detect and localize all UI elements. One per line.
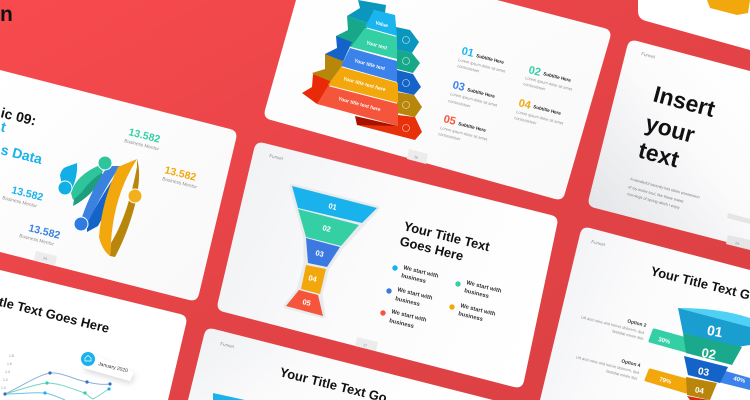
layer numbers: 05: [301, 297, 312, 308]
heading: s Data: [0, 141, 44, 167]
bullet: red: We start with: [391, 309, 427, 324]
axis labels: 1.6: [7, 362, 12, 366]
layer 03: [306, 238, 340, 267]
bullet: red: business: [389, 318, 414, 330]
back steps: [302, 0, 398, 128]
body text: of my entire soul, like these sweet: [628, 185, 685, 204]
item 03: Lorem ipsum dolor sit amet: [450, 91, 499, 108]
heading: tle Text Goes Here: [0, 294, 111, 336]
blue ribbon: [82, 166, 120, 232]
metric: blue: Business Mentor: [19, 233, 55, 248]
pyramid chart: [302, 0, 422, 140]
item 03: consectetuer: [448, 98, 472, 109]
metric: teal: 13.582: [127, 126, 161, 146]
card: ribbons: [0, 70, 236, 300]
metric: cyan: [2, 184, 44, 210]
heading: [0, 104, 44, 167]
front layers: Value: [374, 20, 389, 29]
axis labels: 1.4: [5, 370, 10, 374]
bullet: teal: [455, 280, 502, 300]
panel: ribbon data slide: [0, 70, 236, 300]
metric: yellow: 13.582: [163, 164, 197, 184]
layer numbers: 03: [314, 248, 325, 259]
heading: [636, 81, 718, 173]
item 03: [448, 79, 499, 109]
metric: cyan: 13.582: [10, 184, 44, 204]
metric: blue: [19, 222, 61, 248]
axis labels: [1, 354, 14, 390]
panel: funnel slide: [218, 143, 557, 387]
item 05: Subtitle Here: [458, 121, 487, 133]
tier 04: 04: [694, 385, 705, 396]
front layers: Your text: [365, 40, 388, 52]
heading: text: [636, 137, 682, 173]
item 05: [438, 113, 489, 142]
layer 02: [298, 209, 359, 246]
item 02: Lorem ipsum dolor sit amet: [525, 75, 574, 92]
item 02: Subtitle Here: [543, 71, 572, 83]
logo letter: n: [0, 3, 13, 26]
heading: Your Title Text G: [649, 263, 750, 303]
tier 05: [687, 396, 709, 400]
body text: mornings of spring which I enjoy: [627, 192, 680, 210]
item 04: 04: [517, 97, 533, 112]
item 05: Lorem ipsum dolor sit amet: [440, 125, 489, 142]
line chart: [3, 371, 112, 400]
teal ribbon: [71, 165, 103, 206]
card: funnel: [218, 143, 557, 387]
item 03: 03: [451, 79, 466, 94]
layer numbers: [301, 201, 338, 308]
bullet: cyan: We start with: [403, 265, 439, 280]
heading: ic 09:: [0, 104, 38, 129]
pill: 79%: [646, 370, 690, 392]
metric: yellow: Business Mentor: [162, 176, 198, 191]
option 4: fastidiat minim fais: [606, 368, 638, 381]
panel: top right slide: [638, 0, 750, 50]
front layers: Your title text: [353, 58, 386, 72]
option 2: Lift and raise and helvet dolorem, qua: [581, 314, 646, 335]
label: Funnel: [220, 341, 235, 349]
heading: your: [643, 110, 698, 148]
card: 3D funnel: [540, 228, 750, 400]
metric: cyan: Business Mentor: [2, 195, 38, 210]
bullet: blue: business: [395, 296, 420, 308]
bullet: cyan: business: [401, 273, 426, 285]
page tab: 24: [735, 241, 740, 246]
body text: A wonderful serenity has taken possession: [630, 177, 700, 200]
card: insert: [589, 41, 750, 248]
bullet: yellow: business: [458, 311, 483, 323]
bullet: red: [380, 309, 427, 330]
bullet: teal: business: [464, 288, 489, 300]
ribbon chart: [58, 156, 142, 257]
item 04: Lorem ipsum dolor sit amet: [516, 109, 565, 126]
option 4: Lift and raise and helvet dolorem, qua: [576, 354, 641, 375]
item 02: 02: [527, 64, 542, 79]
page tab: 26: [414, 155, 419, 160]
card: bottom centre: [188, 329, 493, 400]
bullet: teal: We start with: [466, 280, 502, 295]
date pill: January 2020: [98, 361, 129, 374]
item 03: Subtitle Here: [467, 87, 496, 99]
pill: 30%: [650, 330, 690, 351]
metric: blue: 13.582: [27, 222, 61, 242]
item 01: [457, 45, 507, 74]
3D funnel: [678, 308, 750, 400]
heading: Goes Here: [398, 233, 465, 264]
ribbon icons: [58, 156, 142, 231]
layer numbers: 02: [321, 223, 332, 234]
label: Funnel: [641, 51, 656, 60]
panel: insert your text slide: [589, 41, 750, 248]
item 02: [523, 64, 574, 92]
item 02: consectetuer: [523, 81, 547, 92]
option 4: Option 4: [621, 358, 641, 369]
bullet: cyan: [392, 265, 439, 285]
heading: Your Title Text: [402, 218, 492, 254]
layer 05: [286, 290, 323, 316]
bullet: yellow: [449, 303, 496, 323]
page tab: [727, 213, 750, 224]
bullet: blue: [386, 287, 433, 308]
funnel top: [213, 393, 245, 400]
metric: teal: [124, 126, 161, 153]
layer 01: [292, 186, 377, 223]
page tab: 27: [363, 343, 368, 348]
tier 03: 03: [697, 366, 710, 379]
page tab: 24: [43, 256, 48, 261]
layer 04: [301, 265, 326, 294]
axis labels: 1.8: [9, 354, 14, 358]
pill: 40%: [718, 370, 750, 390]
page tab: [34, 251, 57, 265]
bullet: blue: We start with: [397, 287, 433, 302]
metric: teal: Business Mentor: [124, 138, 160, 153]
item 04: [514, 97, 565, 126]
item 05: consectetuer: [438, 131, 462, 142]
card: line chart: [0, 270, 186, 400]
item 01: Lorem ipsum dolor sit amet: [458, 57, 507, 74]
yellow shape: [707, 0, 750, 15]
item 01: 01: [460, 45, 475, 60]
right tags: [357, 27, 422, 140]
front layers: Your title text here: [342, 76, 386, 93]
bullet: yellow: We start with: [460, 303, 496, 318]
panel: pyramid slide: [265, 0, 610, 199]
yellow ribbon: [99, 159, 139, 257]
tier 02: 02: [700, 345, 717, 362]
funnel diagram: [286, 186, 377, 316]
front layers: [317, 10, 398, 126]
axis labels: 1.0: [1, 386, 6, 390]
pill: 40%: 40%: [733, 376, 746, 385]
item 04: Subtitle Here: [533, 104, 562, 116]
funnel outline: [286, 186, 377, 316]
layer numbers: 04: [307, 273, 319, 284]
body text: [627, 177, 700, 210]
cyan ribbon: [60, 163, 77, 189]
label: Funnel: [269, 153, 284, 161]
heading: Insert: [651, 81, 718, 122]
card: pyramid: [265, 0, 610, 199]
layer numbers: 01: [327, 201, 338, 212]
pill: 30%: 30%: [658, 337, 671, 346]
item 05: 05: [442, 113, 457, 128]
panel: line chart slide: [0, 270, 186, 400]
option 2: fastidiat minim fais: [612, 328, 644, 341]
panel: 3D funnel slide: [540, 228, 750, 400]
item 01: Subtitle Here: [476, 53, 505, 65]
axis labels: 1.2: [3, 378, 8, 382]
item 04: consectetuer: [514, 115, 538, 126]
label: Funnel: [591, 239, 606, 247]
pill: 79%: 79%: [659, 377, 672, 386]
front layers: Your title text here: [337, 96, 381, 113]
date pill: [81, 351, 134, 381]
panel: bottom centre slide: [188, 329, 493, 400]
page tab: [407, 149, 428, 164]
metric: yellow: [162, 164, 198, 191]
item 01: consectetuer: [457, 63, 481, 74]
option 2: Option 2: [627, 318, 647, 329]
card: top right: [638, 0, 750, 50]
tier 01: 01: [706, 322, 724, 340]
page tab: [355, 337, 378, 351]
page tab: [726, 235, 750, 250]
